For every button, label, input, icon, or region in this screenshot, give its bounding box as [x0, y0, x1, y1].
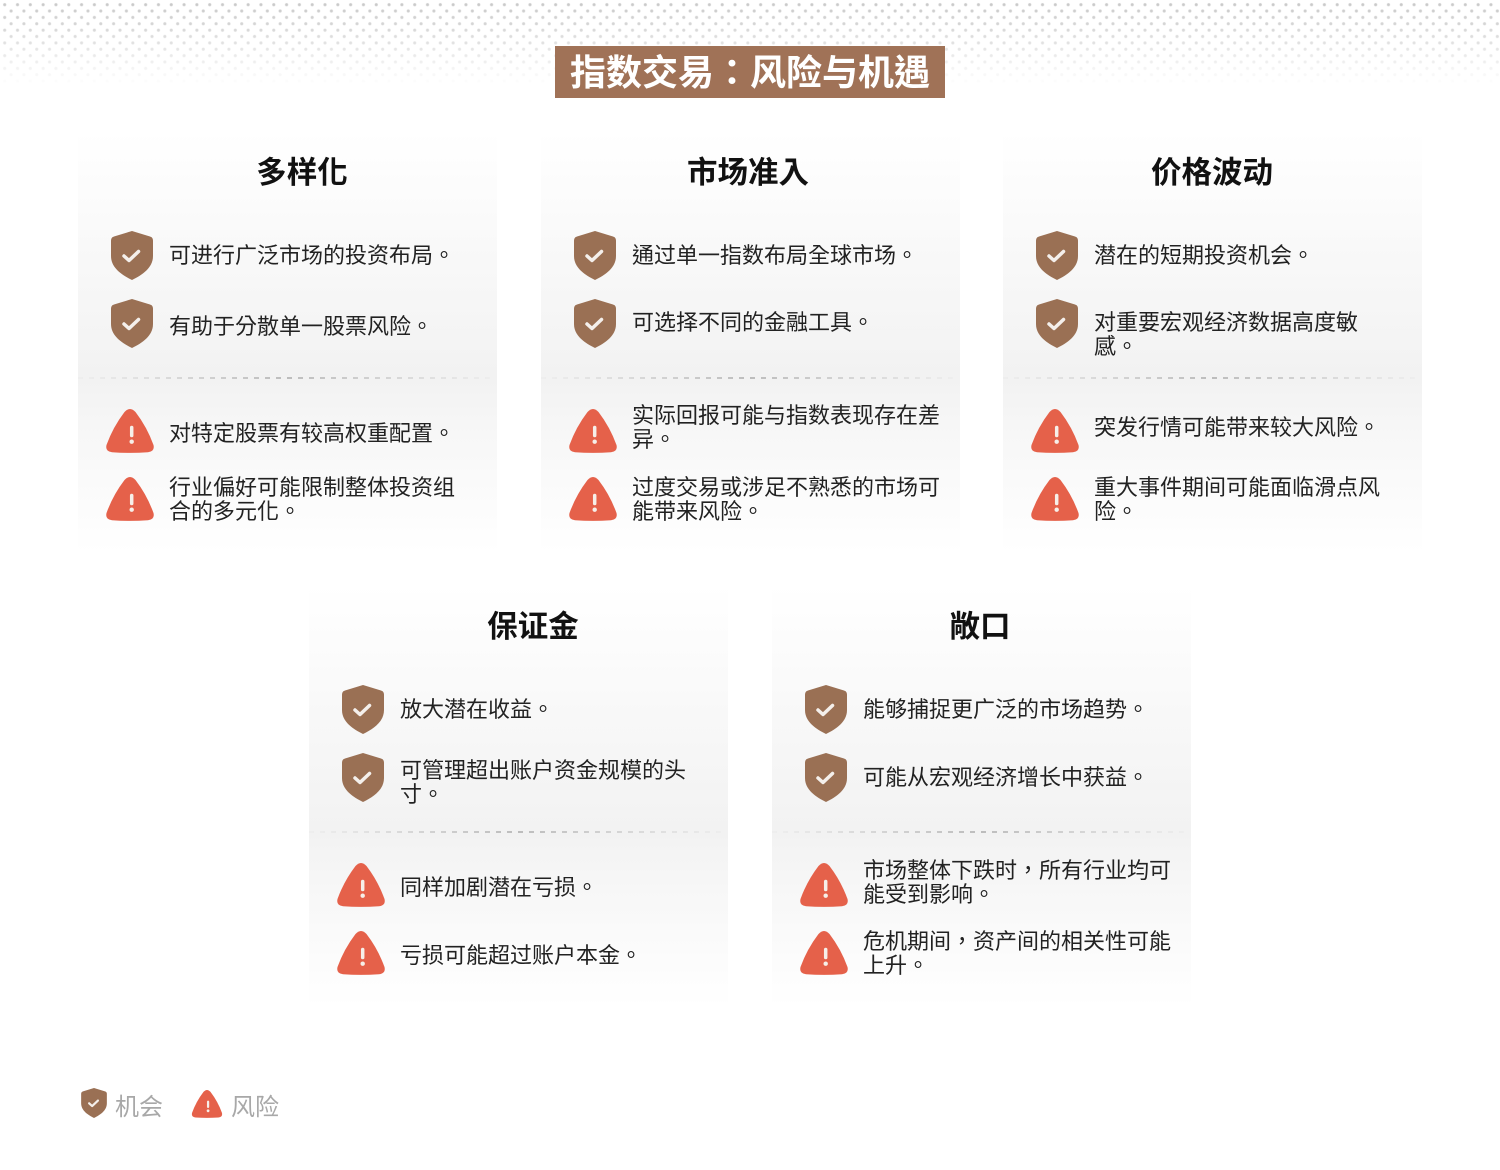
legend: [81, 1088, 279, 1121]
panel: 多样化: [78, 156, 497, 521]
text: risk 1: 异。: [632, 427, 676, 452]
text: risk 2: 危机期间，资产间的相关性可能: [863, 929, 1171, 954]
heading: 市场准入: 市场准入: [687, 156, 809, 190]
text: opportunity 1: 可进行广泛市场的投资布局。: [169, 243, 455, 268]
legend label: 风险: 风险: [231, 1094, 279, 1121]
icon: opportunity shield: [111, 299, 153, 348]
dotted background pattern: [3, 3, 1499, 70]
text: opportunity 1: 放大潜在收益。: [400, 697, 554, 722]
icon: risk triangle: [106, 477, 154, 521]
text: risk 1: 能受到影响。: [863, 882, 995, 907]
text: opportunity 2: 有助于分散单一股票风险。: [169, 314, 433, 339]
text: opportunity 2: 寸。: [400, 782, 444, 807]
text: risk 2: [169, 475, 455, 524]
text: risk 2: 险。: [1094, 499, 1138, 524]
icon: opportunity shield: [342, 753, 384, 802]
icon: risk triangle: [1031, 409, 1079, 453]
text: risk 1: 实际回报可能与指数表现存在差: [632, 403, 940, 428]
panel: 市场准入: [541, 156, 960, 521]
text: opportunity 2: 可选择不同的金融工具。: [632, 310, 874, 335]
icon: risk triangle: [569, 409, 617, 453]
text: opportunity 1: 通过单一指数布局全球市场。: [632, 243, 918, 268]
legend label: 机会: 机会: [115, 1094, 163, 1121]
icon: opportunity shield: [805, 685, 847, 734]
legend icon: opportunity shield: [81, 1088, 107, 1118]
text: risk 1: 同样加剧潜在亏损。: [400, 875, 598, 900]
text: risk 2: 重大事件期间可能面临滑点风: [1094, 475, 1380, 500]
heading: 价格波动: 价格波动: [1151, 156, 1273, 190]
text: risk 1: [863, 858, 1171, 907]
text: risk 2: 行业偏好可能限制整体投资组: [169, 475, 455, 500]
panel: 价格波动: [1003, 156, 1422, 521]
icon: risk triangle: [337, 863, 385, 907]
icon: risk triangle: [1031, 477, 1079, 521]
text: risk 2: 能带来风险。: [632, 499, 764, 524]
text: opportunity 1: 能够捕捉更广泛的市场趋势。: [863, 697, 1149, 722]
text: opportunity 2: 感。: [1094, 334, 1138, 359]
icon: opportunity shield: [342, 685, 384, 734]
panel: 敞口: [772, 610, 1191, 975]
icon: opportunity shield: [574, 231, 616, 280]
text: opportunity 2: 可管理超出账户资金规模的头: [400, 758, 686, 783]
heading: 保证金: 保证金: [487, 610, 579, 644]
text: risk 2: 过度交易或涉足不熟悉的市场可: [632, 475, 940, 500]
heading: 多样化: 多样化: [256, 156, 348, 190]
panel: 保证金: [309, 610, 728, 975]
icon: opportunity shield: [111, 231, 153, 280]
text: risk 2: [1094, 475, 1380, 524]
text: risk 2: 上升。: [863, 953, 929, 978]
icon: risk triangle: [800, 863, 848, 907]
legend icon: risk triangle: [192, 1090, 222, 1118]
text: risk 1: 突发行情可能带来较大风险。: [1094, 415, 1380, 440]
text: opportunity 1: 潜在的短期投资机会。: [1094, 243, 1314, 268]
text: opportunity 2: 可能从宏观经济增长中获益。: [863, 765, 1149, 790]
icon: risk triangle: [800, 931, 848, 975]
text: risk 2: [863, 929, 1171, 978]
text: opportunity 2: [400, 758, 686, 807]
icon: risk triangle: [106, 409, 154, 453]
title: 指数交易：风险与机遇: [570, 52, 930, 93]
icon: risk triangle: [337, 931, 385, 975]
icon: opportunity shield: [1036, 231, 1078, 280]
text: risk 2: [632, 475, 940, 524]
text: risk 1: 市场整体下跌时，所有行业均可: [863, 858, 1171, 883]
text: opportunity 2: [1094, 310, 1358, 359]
icon: opportunity shield: [1036, 299, 1078, 348]
text: opportunity 2: 对重要宏观经济数据高度敏: [1094, 310, 1358, 335]
icon: opportunity shield: [805, 753, 847, 802]
heading: 敞口: 敞口: [950, 610, 1010, 644]
icon: risk triangle: [569, 477, 617, 521]
text: risk 1: 对特定股票有较高权重配置。: [169, 421, 455, 446]
text: risk 2: 亏损可能超过账户本金。: [400, 943, 642, 968]
text: risk 1: [632, 403, 940, 452]
icon: opportunity shield: [574, 299, 616, 348]
text: risk 2: 合的多元化。: [169, 499, 301, 524]
